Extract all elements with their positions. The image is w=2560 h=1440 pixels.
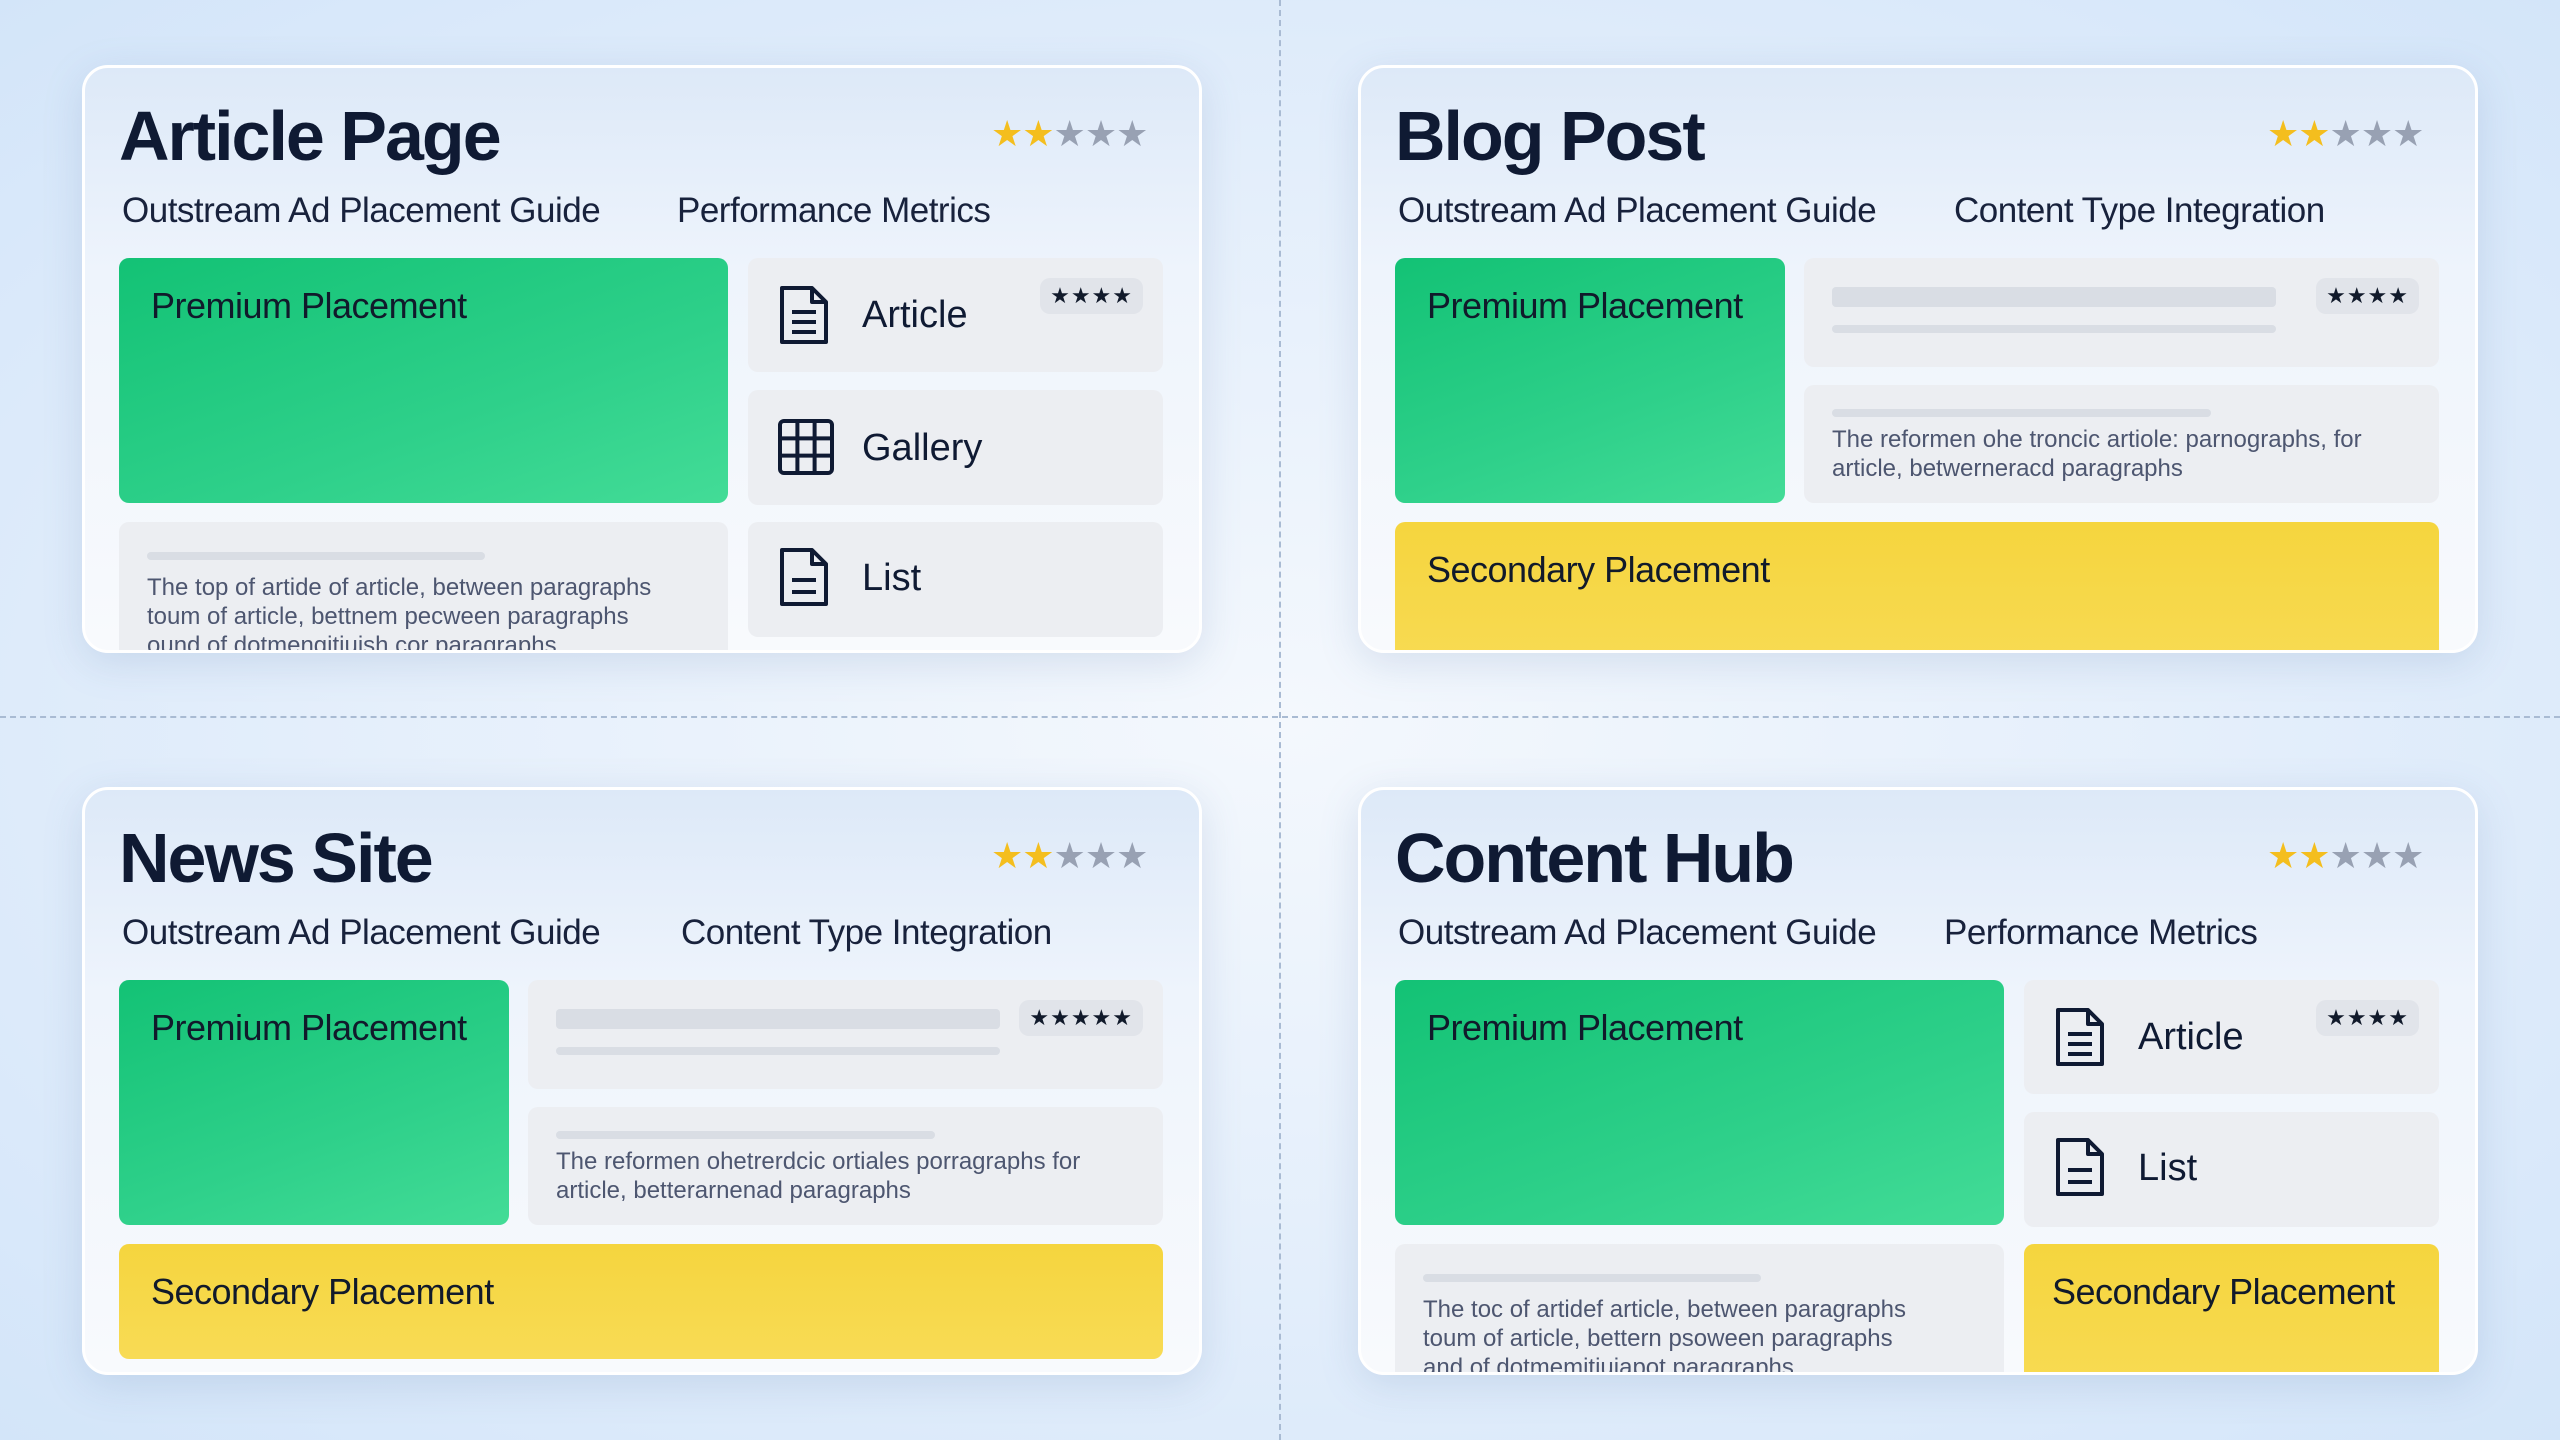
secondary placement block: Secondary Placement bbox=[1427, 549, 1770, 590]
subtitle: performance metrics: Performance Metrics bbox=[677, 191, 990, 230]
icon: list document bbox=[780, 548, 828, 606]
panel: blog post bbox=[1358, 65, 2478, 653]
rating stars: ★★★★★ bbox=[2267, 835, 2423, 876]
premium placement block bbox=[1395, 258, 1785, 503]
rating stars: ★★★★★ bbox=[991, 113, 1147, 154]
premium placement block: Premium Placement bbox=[151, 1007, 467, 1048]
icon: list document bbox=[2056, 1138, 2104, 1196]
heading: content hub: Content Hub bbox=[1395, 819, 1793, 897]
secondary placement block bbox=[1395, 522, 2439, 682]
panel: content hub bbox=[1358, 787, 2478, 1375]
tile: article bbox=[2024, 980, 2439, 1094]
icon: document bbox=[780, 286, 828, 344]
tile: description text bbox=[528, 1107, 1163, 1225]
subtitle: content type: Content Type Integration bbox=[1954, 191, 2325, 230]
premium placement block: Premium Placement bbox=[1427, 285, 1743, 326]
icon: grid bbox=[778, 419, 834, 475]
subtitle: content type: Content Type Integration bbox=[681, 913, 1052, 952]
text block: placement description bbox=[119, 522, 728, 722]
text block: placement description: toum of article, bettern psoween paragraphs bbox=[1423, 1325, 1893, 1352]
tile: article: Article bbox=[2138, 1016, 2244, 1058]
icon: document bbox=[2056, 1008, 2104, 1066]
subtitle: guide: Outstream Ad Placement Guide bbox=[1398, 191, 1876, 230]
heading: blog post: Blog Post bbox=[1395, 97, 1704, 175]
secondary placement block bbox=[119, 1244, 1163, 1359]
tile: description text: The reformen ohetrerdcic ortiales porragraphs for bbox=[556, 1148, 1080, 1175]
panel: article page bbox=[82, 65, 1202, 653]
premium placement block bbox=[119, 258, 728, 503]
tile: article: ★★★★ bbox=[1050, 283, 1133, 308]
rating stars: ★★★★★ bbox=[2267, 113, 2423, 154]
subtitle: guide: Outstream Ad Placement Guide bbox=[1398, 913, 1876, 952]
tile: list: List bbox=[2138, 1147, 2197, 1189]
premium placement block bbox=[1395, 980, 2004, 1225]
text block: placement description bbox=[1395, 1244, 2004, 1440]
text block: placement description: The toc of artidef article, between paragraphs bbox=[1423, 1296, 1906, 1323]
text block: placement description: The top of artide of article, between paragraphs bbox=[147, 574, 651, 601]
tile: placeholder bars bbox=[528, 980, 1163, 1089]
tile: list bbox=[2024, 1112, 2439, 1227]
tile: description text bbox=[1804, 385, 2439, 503]
premium placement block bbox=[119, 980, 509, 1225]
rating stars: ★★★★★ bbox=[991, 835, 1147, 876]
subtitle: guide: Outstream Ad Placement Guide bbox=[122, 913, 600, 952]
tile: article: ★★★★ bbox=[2326, 1005, 2409, 1030]
premium placement block: Premium Placement bbox=[1427, 1007, 1743, 1048]
secondary placement block: Secondary Placement bbox=[2052, 1271, 2395, 1312]
text block: placement description: toum of article, bettnem pecween paragraphs bbox=[147, 603, 629, 630]
tile: article bbox=[748, 258, 1163, 372]
secondary placement block: Secondary Placement bbox=[151, 1271, 494, 1312]
subtitle: performance metrics: Performance Metrics bbox=[1944, 913, 2257, 952]
tile: gallery: Gallery bbox=[862, 427, 982, 469]
tile: placeholder bars bbox=[1804, 258, 2439, 367]
tile: description text: article, betterarnenad paragraphs bbox=[556, 1177, 911, 1204]
premium placement block: Premium Placement bbox=[151, 285, 467, 326]
tile: article: Article bbox=[862, 294, 968, 336]
heading: news site: News Site bbox=[119, 819, 432, 897]
tile: list: List bbox=[862, 557, 921, 599]
tile: list bbox=[748, 522, 1163, 637]
tile: placeholder bars: ★★★★ bbox=[2326, 283, 2409, 308]
panel: news site bbox=[82, 787, 1202, 1375]
heading: article page: Article Page bbox=[119, 97, 500, 175]
secondary placement block bbox=[2024, 1244, 2439, 1404]
subtitle: guide: Outstream Ad Placement Guide bbox=[122, 191, 600, 230]
tile: gallery bbox=[748, 390, 1163, 505]
tile: placeholder bars: ★★★★★ bbox=[1029, 1005, 1133, 1030]
tile: description text: The reformen ohe troncic artiole: parnographs, for bbox=[1832, 426, 2362, 453]
tile: description text: article, betwerneracd paragraphs bbox=[1832, 455, 2183, 482]
